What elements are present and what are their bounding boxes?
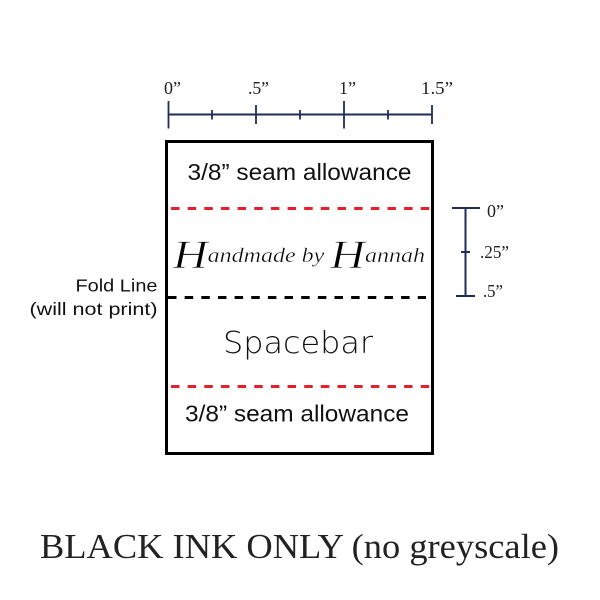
horizontal ruler: .5” bbox=[248, 78, 269, 98]
bottom seam allowance text: 3/8” seam allowance bbox=[185, 400, 409, 426]
script brand text: H bbox=[172, 232, 210, 277]
Spacebar text: Spacebar bbox=[223, 326, 374, 361]
label outline bbox=[166, 142, 432, 454]
vertical ruler: .25” bbox=[480, 242, 509, 262]
footer note: BLACK INK ONLY (no greyscale) bbox=[40, 527, 559, 566]
fold line bbox=[168, 296, 426, 299]
script brand text: annah bbox=[365, 245, 425, 267]
horizontal ruler: 0” bbox=[164, 78, 181, 98]
horizontal ruler: 1.5” bbox=[421, 78, 453, 98]
top seam line bbox=[171, 207, 430, 210]
bottom seam line bbox=[171, 385, 430, 388]
fold line label bbox=[30, 276, 158, 319]
fold line label: (will not print) bbox=[30, 299, 158, 319]
fold line label: Fold Line bbox=[76, 276, 158, 296]
script brand text: andmade by bbox=[208, 245, 330, 267]
vertical ruler: 0” bbox=[487, 201, 504, 221]
top seam allowance text: 3/8” seam allowance bbox=[188, 159, 412, 185]
horizontal ruler: 1” bbox=[339, 78, 356, 98]
script brand text: H bbox=[329, 232, 368, 277]
horizontal ruler bbox=[164, 78, 453, 128]
vertical ruler: .5” bbox=[483, 281, 503, 301]
vertical ruler bbox=[452, 201, 509, 301]
